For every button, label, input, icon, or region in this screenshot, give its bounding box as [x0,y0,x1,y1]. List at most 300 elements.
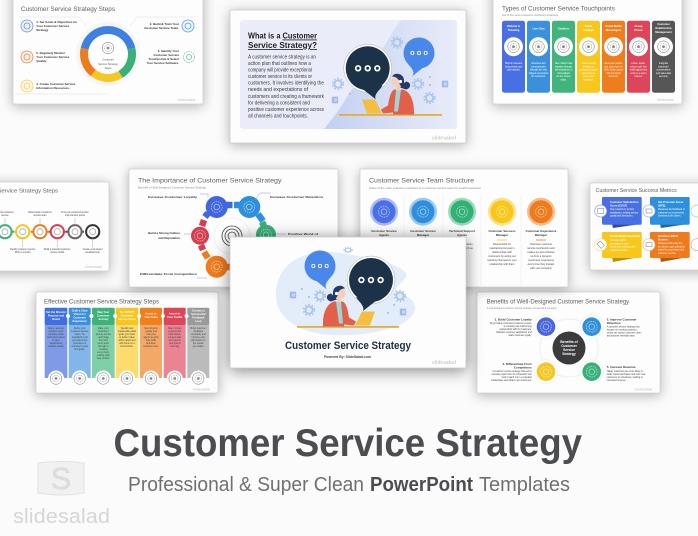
step columns: constantly and [191,333,206,336]
benefits diagram: Customer [561,344,578,348]
step columns: making each [97,355,111,357]
metric cards: Assesses how easy it is [658,242,683,245]
connector lines [15,17,196,94]
importance labels: Differentiate From Competitors [140,272,197,276]
step columns: plan based on [191,340,206,342]
benefit texts: relationships with its customers. [499,328,532,331]
timeline labels: Identify customer service [10,248,36,251]
gears and documents [332,37,448,103]
touchpoint columns: insights on [583,65,595,68]
benefit texts: Competitors [514,366,532,370]
team role labels: Customer Experience [526,229,557,233]
benefit texts: 2. Improve Customer [607,318,637,322]
step columns: from first [99,339,108,342]
touchpoint columns: experience in [582,72,596,75]
step columns: the results [193,342,204,345]
slide: centre cover slide [230,237,466,368]
step labels: 3. Identify Your [158,49,180,53]
step columns: Map Your [97,310,109,314]
benefits diagram: Benefits of [560,340,579,344]
step columns: systems that [168,330,182,333]
step columns: company vision [48,334,65,336]
step labels: Touchpoints & Select [149,57,179,61]
touchpoint columns: Listen, assist, [632,62,646,65]
team role labels: Manager [496,233,509,237]
touchpoint columns: fast via social [607,72,621,75]
step columns: Bring customer [191,327,206,330]
importance labels: Positive Word of [288,232,318,236]
metric cards: satisfaction, relating service [610,211,639,214]
slide: importance of customer service strategy [129,169,338,287]
touchpoint columns: communicates [531,65,547,68]
slide: strategy steps timeline [0,182,109,271]
benefit texts: focuses on meeting customer [607,328,637,332]
step columns: standards to all [72,336,88,339]
benefit texts [490,318,646,382]
body paragraph: positive customer experience across [248,107,324,113]
step labels: Quality [36,59,47,63]
benefit texts: 4. Differentiate From [503,362,532,366]
step columns: Vision for [74,312,86,316]
slide: benefits of well-designed strategy [477,292,660,393]
touchpoint columns: Email [585,24,592,28]
tagline: Professional & Super Clean [128,474,364,496]
team role labels: Manager [417,233,430,237]
team role labels: Agents [457,233,467,237]
metric cards: Business Effort [658,234,678,238]
touchpoint columns: and customers on [604,65,623,68]
footer mark: slidesalad [193,388,210,392]
logo mark [38,462,84,495]
main title: Customer Service Strategy [114,422,583,465]
body paragraph: for delivering a consistent and [248,100,310,106]
timeline labels: service toolkit [50,251,65,254]
timeline labels [0,211,103,254]
touchpoint columns: solve in a warm [631,72,647,75]
benefit texts: By providing consistent customer service [490,322,532,325]
leader lines [184,193,286,278]
step columns: and drive [146,342,156,345]
team role labels: Customer Success [488,229,516,233]
touchpoint columns: clear articles. [507,69,521,72]
benefit texts: needs can reduce customer churn [607,332,642,334]
step columns: Craft a Clear [72,308,88,312]
touchpoint columns: Chatbots [558,26,570,30]
logo wordmark: slidesalad [13,506,110,528]
step columns: Select proper [168,327,182,330]
step columns: Successful [191,312,206,316]
touchpoint columns: DMs. Solve issues [604,70,624,72]
metric cards: customer service. [658,252,676,255]
importance labels: and Reputation [158,236,180,240]
touchpoint columns: widgets convenient [529,72,549,75]
step columns: improve your [192,336,205,339]
touchpoint columns: using tickets and [505,65,523,68]
icons [21,20,194,92]
touchpoint columns: manner. [634,75,643,78]
step columns: processes to [73,342,87,345]
metric cards: quality and interaction. [610,215,633,218]
lavender panel [240,20,457,129]
step columns: Loop [195,319,202,323]
metric cards: Measures the likelihood of [658,208,685,211]
step columns: Set SMART [120,310,135,314]
touchpoint columns: today. [560,78,567,82]
step columns: every client, [97,351,110,354]
slide title: Customer Service Success Metrics [596,188,677,194]
touchpoint columns: Surveys [583,28,594,32]
step columns: connect data [168,336,182,339]
slide title: Benefits of Well-Designed Customer Service Strategy [487,299,630,306]
step columns: Recruit good [144,327,158,330]
body paragraph: A customer service strategy is an [248,54,316,60]
slide title: Customer Service Team Structure [369,178,474,185]
centre fingerprint icon [214,218,250,254]
timeline labels: Build a powerful customer [44,248,71,251]
step columns: each stage [98,336,110,339]
step columns: step smooth. [97,357,110,360]
metric cards: solved by your teams and [658,249,685,252]
step columns: their skills [146,339,157,342]
step columns: you collect. [193,345,204,348]
step columns: Invest in [169,312,181,316]
footer mark: slidesalad [635,388,652,392]
metric cards: perception of your [610,242,629,245]
touchpoint columns: survey and [583,75,595,78]
benefit texts: Retention [607,321,621,325]
step columns: Set the Mission [46,310,66,314]
step labels: Customer Service [153,53,179,57]
touchpoint columns: accounts. [609,75,619,78]
dark speech bubble [344,44,392,99]
body paragraph: all channels and touchpoints. [248,114,308,120]
step columns: to steer [52,339,60,342]
step columns [45,308,209,378]
metric cards: customers to recommend [658,211,685,214]
step labels: Information Resources. [36,86,70,90]
step columns: Your Team [144,315,158,319]
powered by line: Powered By: SlideSalad.com [324,355,371,359]
team role labels: customers by acting out [488,254,516,258]
team role labels: so from a dynamic [530,254,552,258]
team role labels: Technical systems [451,242,473,246]
team role labels: every time they interact [528,262,555,266]
benefit texts: A customer service strategy that [607,326,640,328]
step columns: people and [145,331,157,333]
step labels: 5. Regularly Monitor [36,51,66,55]
metric cards: Social Media Sentiment [610,234,640,238]
step labels: Strategy [36,28,49,32]
step columns: track issues, [168,333,181,336]
metric cards: Customer Satisfaction [610,200,639,204]
touchpoint columns: Website & [507,24,520,28]
benefit texts: marketplace and attract new customers. [491,379,532,382]
step icons [48,370,206,386]
touchpoint columns: on any screen [556,75,571,78]
step columns: journey across [95,333,112,336]
footer mark: slidesalad [85,265,102,269]
touchpoint columns: Messengers [606,28,622,32]
timeline labels: service [1,214,9,217]
slide subtitle: Benefits of Well-Designed Customer Service Strategy [138,186,207,190]
touchpoint columns [502,21,675,93]
footer mark: slidesalad [657,98,674,102]
touchpoint columns: Management [655,30,672,34]
step columns: your plans and [72,339,88,342]
step labels [36,20,180,90]
footer mark: slidesalad [432,136,456,142]
benefit texts: customers to a business, leading to [607,376,643,379]
step labels: Your Service Software. [147,61,179,65]
ring centre label: Customer [102,58,114,62]
timeline labels: Create a consistent [83,248,103,251]
team role labels: relationship with them [489,262,515,266]
touchpoint columns: Customer [657,22,670,26]
body paragraph: customer service to its clients or [248,74,312,80]
step columns: customer's [98,330,110,333]
team role labels: relationships with [492,250,512,254]
benefits diagram: Strategy [562,352,576,356]
team role labels: service touchpoints and [527,246,555,250]
slide subtitle: Some of the main customer members of a customer service team for small businesses [369,187,482,190]
timeline labels: KPIs to monitor [15,251,31,254]
touchpoint columns: Relationship [655,26,672,30]
touchpoint columns: chat widgets [557,72,571,75]
slide: customer service success metrics [590,183,698,270]
desk [339,114,442,116]
benefit texts: 1. Build Customer Loyalty [495,318,532,322]
team role labels: Responsible for [493,242,511,246]
blue speech bubble [304,250,336,290]
footer mark: slidesalad [178,98,195,102]
metric cards: responses online. [610,249,628,252]
slide: types of customer service touchpoints [493,0,682,104]
touchpoint columns: Live Chat [532,26,545,30]
step columns: customer needs [72,345,89,348]
team role labels: solutions that secure your [487,258,517,262]
cover title: Customer Service Strategy [285,340,412,352]
step columns: through to [98,345,109,348]
arc node chain [191,196,276,278]
step columns: Your Toolkit [167,315,182,319]
metric cards: How customers' perfect [610,208,634,211]
step columns: retaining [99,348,108,351]
touchpoint columns: Collect useful [582,62,596,65]
slide: what is a customer service strategy [230,10,466,143]
touchpoint columns: through live chat [530,69,547,72]
benefit texts: retain customer loyalty. [508,334,532,337]
team role labels: Oversees customer [530,242,552,246]
slide: customer service strategy steps ring [13,0,203,104]
timeline labels: feedback loop [86,252,101,254]
step columns: train your [146,333,156,336]
tagline [128,474,570,496]
footer mark: slidesalad [432,360,456,366]
step columns: Aligns customer [48,327,64,330]
metric cards: brand over channels and [610,246,636,249]
touchpoint columns: answers through [555,65,573,68]
slide: customer service team structure [360,169,568,287]
team role labels: makes up and cohesive [527,250,555,254]
step columns: and goals. [74,349,85,351]
timeline labels: service team [33,214,47,217]
team role labels [371,229,557,270]
timeline labels: Build custom customer [28,211,52,214]
step columns: your agents [169,342,182,345]
team role icons [370,198,555,226]
step columns: towards quality [48,345,65,348]
touchpoint columns: Ticketing [508,28,520,32]
team role labels: with your company [530,266,553,270]
step columns: Conduct a [192,308,205,312]
importance labels [140,195,323,276]
benefit texts: Maintain customer satisfaction and [496,331,532,334]
team role labels: specialists such as [451,246,474,250]
tagline: PowerPoint [370,474,473,496]
step columns: guide your team [119,333,135,336]
step columns: Specific and [121,328,134,330]
logo letter: S [51,461,71,496]
step columns: Feedback [192,316,205,320]
blue blob [324,20,457,129]
touchpoint columns: build rapport and [630,69,648,72]
touchpoint columns: Help for answers [505,62,523,65]
metric cards: for clients to get questions [658,245,686,248]
step columns: Customer [73,316,86,320]
body paragraph [248,54,324,119]
team role labels: Manager [535,233,548,237]
column dividers [404,196,521,287]
logo: slidesalad watermark [13,461,110,528]
step columns: Service Goals [118,317,136,321]
touchpoint columns: customers' [658,65,670,68]
step columns: time horizon. [120,345,134,348]
touchpoint columns: Meet your people [605,62,623,65]
step columns: and support [169,339,181,342]
team role labels: maintaining long-term [490,246,514,250]
ring centre label: Service Strategy [98,62,119,66]
step columns: Define your [74,327,86,330]
touchpoint columns: self-assistance in [555,69,573,72]
timeline labels: improvement points [65,214,86,217]
person with laptop [323,286,375,326]
slide title: Customer Service Strategy Steps [21,6,116,13]
step labels: 2. Build & Train Your [150,22,180,26]
step columns: measurable goals [118,330,137,333]
touchpoint columns: Social Media [605,24,622,28]
step labels: Your Customer Service [36,24,70,28]
step columns: Purpose and [48,314,64,318]
dark speech bubble [347,256,395,311]
step columns: departments [50,342,63,345]
touchpoint columns: Integrate [659,62,669,65]
step columns: Invest in [146,312,157,316]
touchpoint columns: securely. [659,75,668,78]
touchpoint columns: phone calls that [630,65,647,68]
touchpoint columns: customers' overall [579,69,598,72]
touchpoint columns: feedback. [584,80,594,82]
ring centre label [98,58,119,70]
touchpoint columns: Group [634,24,643,28]
step columns: feedback [194,331,204,333]
team role labels: Customer Service [410,229,436,233]
step columns: Journey [98,317,109,321]
touchpoint columns: and sales data [656,72,672,75]
slide subtitle: List of the seven customer touchpoint channels [502,14,559,17]
team role labels: Agents [379,233,389,237]
slide heading [248,32,318,50]
team role labels: customers' experience [528,258,554,262]
timeline labels: Find your preferred service [61,211,89,214]
metric cards: Analyzes public [610,239,627,242]
step labels: Your Customer Service [36,55,70,59]
body paragraph: customers. It involves identifying the [248,81,324,87]
team role labels: Technical Support [449,229,475,233]
body paragraph: customers and creating a framework [248,94,324,100]
gears and documents [290,247,406,315]
benefit texts: increased revenue. [607,379,627,382]
metric icons [595,205,698,251]
benefit texts: Happy customers are more likely to [607,370,643,373]
step labels: 4. Create Customer Service [36,82,76,86]
slide heading: Service Strategy? [248,41,317,50]
touchpoint columns: Give visitors' fast [555,62,572,65]
step columns: Brand [52,317,60,321]
metric cards: business to the others. [658,215,681,218]
metric cards: Monitor [658,237,668,241]
benefit texts: make repeat purchases and refer new [607,373,646,376]
body paragraph: action plan that outlines how a [248,61,311,67]
importance labels: Build a Strong Culture [148,231,180,235]
step columns: vision. Tie [75,334,86,336]
body paragraph: company will provide exceptional [248,68,312,74]
ring centre label: Steps [105,66,112,70]
ring diagram [76,22,140,86]
timeline [0,218,99,247]
benefit texts: A customer service strategy that sets a [492,370,532,373]
slide heading: What is a Customer [248,32,318,40]
step columns: with focus on a [119,342,135,345]
step columns: Experience [73,319,87,323]
benefit texts: a company can build strong [504,325,532,328]
step columns: service to your [49,330,64,333]
step labels: Customer Service Team. [144,26,179,30]
metric cards: Net Promoter Score [658,200,684,204]
step columns: touch point [98,342,109,345]
importance labels: Increase Customer Loyalty [148,195,197,199]
step columns: Make your [98,327,109,330]
benefit texts: 5. Increase Revenue [607,365,636,369]
benefits diagram [534,315,604,384]
step columns: and brand values [47,336,66,339]
step columns: each day. [170,346,180,348]
tagline: Templates [479,474,570,496]
benefit texts: company apart from its competitors can [491,373,532,376]
slide title: Types of Customer Service Touchpoints [502,6,616,12]
slide subtitle: A well-designed customer service strategy can benefit a company [487,307,557,310]
blue speech bubble [404,38,434,76]
step labels: 1. Set Goals & Objectives for [36,20,78,24]
step columns: within reach and [119,339,136,342]
benefit texts: and improve retention rates. [607,334,636,338]
touchpoint columns: conversations [656,69,671,72]
slide title: The Importance of Customer Service Strategy [138,178,282,185]
benefits diagram: Service [563,348,575,352]
metric cards: (NPS) [658,203,665,207]
team role labels: Customer Service [371,229,397,233]
metric cards: Score (CSAT) [610,203,627,207]
desk [297,326,399,328]
